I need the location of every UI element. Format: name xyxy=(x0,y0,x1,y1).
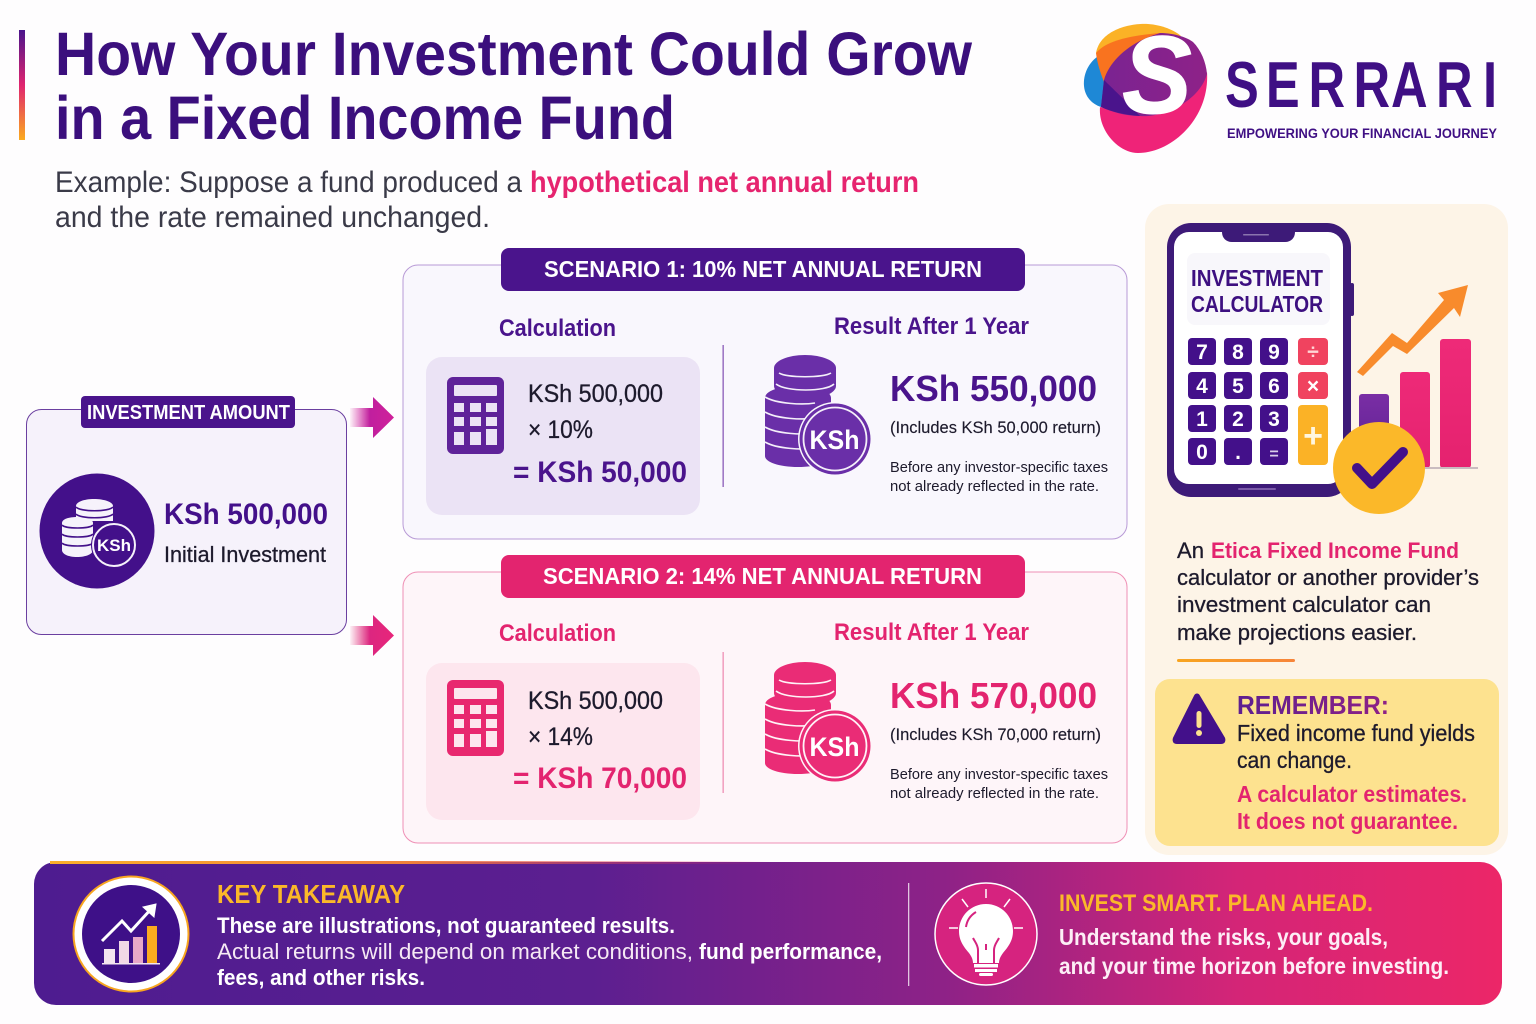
tax disclaimer xyxy=(890,767,1108,802)
investment value: KSh 500,000 xyxy=(164,498,328,531)
subtitle: Example: Suppose a fund produced a xyxy=(55,166,522,199)
calculation box xyxy=(426,663,700,820)
key takeaway text: Actual returns will depend on market conditions, xyxy=(217,939,693,964)
illustration: phone calculator and growth chart xyxy=(1167,223,1478,514)
phone xyxy=(1167,223,1354,497)
panel: calculator sidebar xyxy=(1145,204,1508,855)
result note: (Includes KSh 70,000 return) xyxy=(890,725,1101,744)
result note: (Includes KSh 50,000 return) xyxy=(890,418,1101,437)
callout: remember xyxy=(1155,679,1499,846)
keypad: 1 xyxy=(1196,408,1208,431)
tax disclaimer: not already reflected in the rate. xyxy=(890,479,1099,495)
calculation text: × 10% xyxy=(528,416,593,444)
keypad: 4 xyxy=(1196,375,1208,398)
keypad: 2 xyxy=(1232,408,1244,431)
title xyxy=(55,20,973,152)
title: in a Fixed Income Fund xyxy=(55,84,675,152)
calculation box xyxy=(426,357,700,515)
keypad: 9 xyxy=(1268,341,1280,364)
phone screen title: INVESTMENT xyxy=(1191,265,1323,291)
invest smart text: INVEST SMART. PLAN AHEAD. xyxy=(1059,890,1373,917)
keypad: 8 xyxy=(1232,341,1244,364)
result value: KSh 570,000 xyxy=(890,675,1097,716)
result heading: Result After 1 Year xyxy=(834,313,1029,340)
icon: coin stack xyxy=(765,662,872,783)
keypad: 5 xyxy=(1232,375,1244,398)
arrow to scenario 1 xyxy=(350,397,394,438)
keypad: 6 xyxy=(1268,375,1280,398)
invest smart text: and your time horizon before investing. xyxy=(1059,953,1449,979)
scenario 2 header xyxy=(501,555,1025,598)
key takeaway text: fund performance, xyxy=(699,939,882,964)
calculation text: = KSh 70,000 xyxy=(513,762,687,795)
icon: coins in circle xyxy=(40,474,154,588)
tax disclaimer xyxy=(890,460,1108,495)
sidebar text xyxy=(1177,538,1479,645)
tax disclaimer: Before any investor-specific taxes xyxy=(890,767,1108,783)
keypad: 3 xyxy=(1268,408,1280,431)
remember text xyxy=(1237,690,1475,834)
key takeaway text: These are illustrations, not guaranteed results. xyxy=(217,913,675,938)
sidebar text: Etica Fixed Income Fund xyxy=(1211,538,1459,563)
calculation text xyxy=(513,380,687,489)
icon: light bulb xyxy=(935,883,1037,985)
growth arrow xyxy=(1357,285,1468,376)
calculation heading: Calculation xyxy=(499,620,616,647)
tagline: EMPOWERING YOUR FINANCIAL JOURNEY xyxy=(1227,126,1497,141)
keypad: 0 xyxy=(1196,441,1208,464)
remember text: can change. xyxy=(1237,747,1352,773)
key takeaway text: fees, and other risks. xyxy=(217,965,425,990)
scenario 2 header: SCENARIO 2: 14% NET ANNUAL RETURN xyxy=(543,563,982,589)
keypad: + xyxy=(1303,417,1323,455)
keypad: 7 xyxy=(1196,341,1208,364)
logo: Serrari xyxy=(1084,14,1497,153)
tax disclaimer: not already reflected in the rate. xyxy=(890,786,1099,802)
remember text: A calculator estimates. xyxy=(1237,781,1467,807)
logo mark xyxy=(1084,14,1207,153)
keypad: × xyxy=(1307,375,1319,398)
arrow to scenario 2 xyxy=(350,615,394,656)
remember text: Fixed income fund yields xyxy=(1237,720,1475,746)
scenario 1 header: SCENARIO 1: 10% NET ANNUAL RETURN xyxy=(544,256,982,282)
icon: growth chart badge xyxy=(72,876,190,992)
sidebar text: make projections easier. xyxy=(1177,620,1417,645)
scenario 1 header xyxy=(501,248,1025,291)
badge: investment amount: INVESTMENT AMOUNT xyxy=(87,402,290,424)
subtitle xyxy=(55,166,919,234)
keypad xyxy=(1188,338,1328,465)
icon: coin stack: KSh xyxy=(810,425,860,455)
sidebar text: calculator or another provider’s xyxy=(1177,565,1479,590)
subtitle: hypothetical net annual return xyxy=(530,166,919,199)
icon: coins in circle: KSh xyxy=(97,536,131,555)
keypad: . xyxy=(1235,441,1241,464)
icon: warning triangle xyxy=(1174,694,1224,743)
calculation text: KSh 500,000 xyxy=(528,380,663,408)
icon: coin stack: KSh xyxy=(810,732,860,762)
check badge xyxy=(1333,422,1425,514)
remember text: REMEMBER: xyxy=(1237,690,1389,720)
calculation heading: Calculation xyxy=(499,315,616,342)
keypad: ÷ xyxy=(1307,341,1319,364)
remember text: It does not guarantee. xyxy=(1237,808,1458,834)
title accent bar xyxy=(19,30,25,140)
result value: KSh 550,000 xyxy=(890,368,1097,409)
growth bars xyxy=(1359,339,1478,470)
logo letter S: S xyxy=(1122,14,1192,137)
investment caption: Initial Investment xyxy=(164,542,326,567)
panel: investment amount xyxy=(26,396,346,634)
calculation text: × 14% xyxy=(528,723,593,751)
calculation text xyxy=(513,687,687,795)
keypad: = xyxy=(1269,446,1279,463)
icon: calculator xyxy=(447,377,504,454)
invest smart text xyxy=(1059,890,1449,979)
subtitle: and the rate remained unchanged. xyxy=(55,201,490,234)
icon: coin stack xyxy=(765,355,872,476)
sidebar text: An xyxy=(1177,538,1204,563)
sidebar text: investment calculator can xyxy=(1177,592,1431,617)
tax disclaimer: Before any investor-specific taxes xyxy=(890,460,1108,476)
phone screen title: CALCULATOR xyxy=(1191,291,1323,317)
calculation text: = KSh 50,000 xyxy=(513,456,687,489)
key takeaway text xyxy=(217,879,882,990)
footer band xyxy=(34,861,1502,1005)
invest smart text: Understand the risks, your goals, xyxy=(1059,924,1388,950)
phone screen title xyxy=(1191,265,1323,317)
wordmark: SERRARI xyxy=(1225,49,1497,121)
result heading: Result After 1 Year xyxy=(834,619,1029,646)
key takeaway text: KEY TAKEAWAY xyxy=(217,879,405,909)
badge: investment amount xyxy=(81,396,295,428)
icon: calculator xyxy=(447,680,504,756)
title: How Your Investment Could Grow xyxy=(55,20,973,88)
panel: scenario 1 xyxy=(403,248,1127,539)
calculation text: KSh 500,000 xyxy=(528,687,663,715)
panel: scenario 2 xyxy=(403,555,1127,843)
